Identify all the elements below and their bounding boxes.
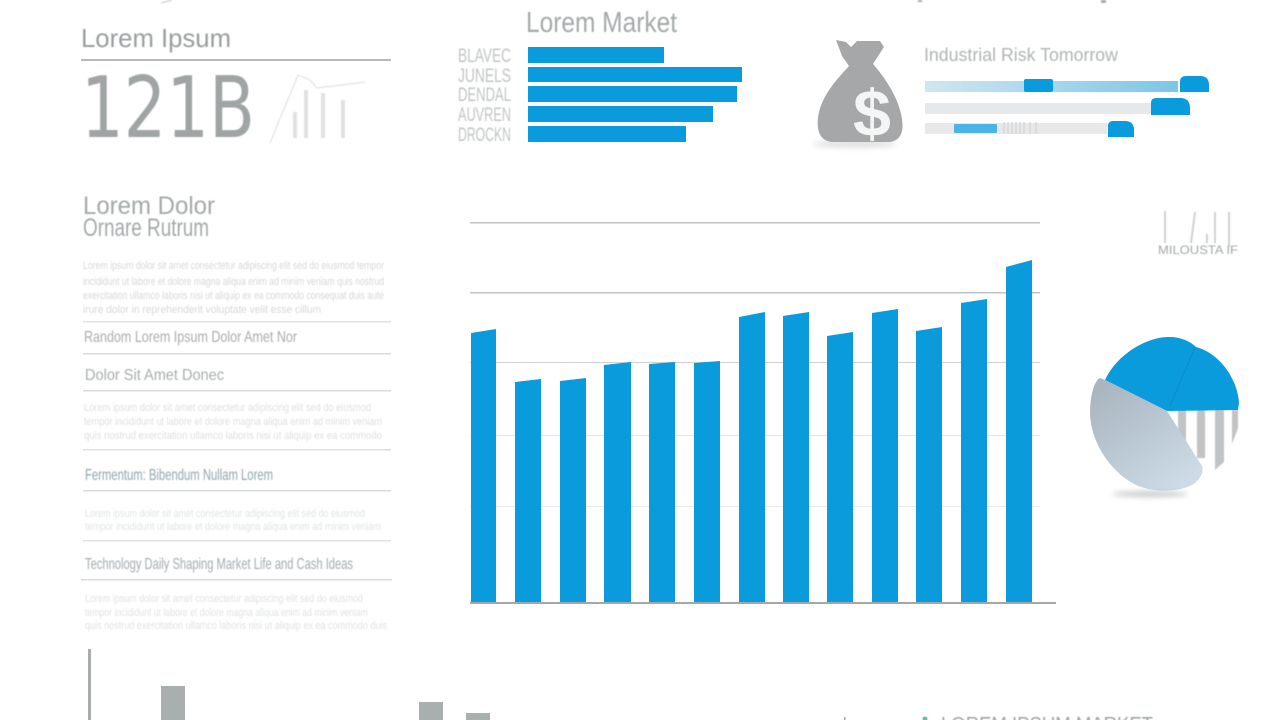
- icon: money bag: [813, 40, 903, 150]
- paragraph 1: Lorem ipsum dolor sit amet consectetur adipiscing elit sed do eiusmod tempor: [83, 260, 384, 272]
- row heading 2: Dolor Sit Amet Donec: [85, 367, 224, 384]
- paragraph 3: tempor incididunt ut labore et dolore magna aliqua enim ad minim veniam: [85, 521, 381, 533]
- paragraph 2: [84, 402, 382, 442]
- paragraph 2: Lorem ipsum dolor sit amet consectetur adipiscing elit sed do eiusmod: [84, 402, 371, 414]
- progress title: Industrial Risk Tomorrow: [924, 45, 1119, 65]
- bars: [161, 686, 490, 720]
- progress bar 2: [925, 98, 1190, 115]
- paragraph 3: Lorem ipsum dolor sit amet consectetur adipiscing elit sed do eiusmod: [85, 508, 365, 520]
- gridlines: [470, 222, 1040, 507]
- chart title: Lorem Market: [526, 7, 677, 39]
- striped slice: [1178, 410, 1238, 470]
- panel: headline metric: [81, 23, 391, 158]
- bars: [528, 47, 742, 142]
- icon: small bar chart with label: MILOUSTA IF: [1158, 243, 1238, 257]
- bar labels: JUNELS: [458, 66, 511, 87]
- icon: mini line and bar chart: [270, 75, 365, 143]
- x axis: [470, 602, 1056, 604]
- paragraph 4: tempor incididunt ut labore et dolore magna aliqua enim ad minim veniam: [85, 607, 368, 619]
- bar labels: DROCKN: [458, 125, 511, 146]
- panel: left text column: [81, 192, 392, 632]
- subheading: Ornare Rutrum: [83, 214, 209, 242]
- paragraph 1: [83, 260, 384, 316]
- panel: progress bars: [924, 45, 1209, 137]
- row heading 3: Fermentum: Bibendum Nullam Lorem: [85, 467, 273, 484]
- progress bar 3: [925, 121, 1134, 137]
- paragraph 2: tempor incididunt ut labore et dolore magna aliqua enim ad minim veniam: [84, 416, 382, 428]
- progress bar 1: [925, 76, 1209, 92]
- paragraph 4: Lorem ipsum dolor sit amet consectetur adipiscing elit sed do eiusmod: [85, 593, 363, 605]
- bar labels: [458, 46, 511, 146]
- heading: Lorem Ipsum: Lorem Ipsum: [81, 23, 231, 53]
- paragraph 1: exercitation ullamco laboris nisi ut aliquip ex ea commodo consequat duis aute: [83, 290, 384, 302]
- bar labels: AUVREN: [458, 105, 511, 126]
- footer label cut off: [844, 714, 1153, 720]
- subheading: Lorem Dolor: [83, 192, 215, 220]
- paragraph 1: irure dolor in reprehenderit voluptate velit esse cillum: [83, 304, 321, 316]
- columns: [471, 260, 1032, 604]
- top edge fragments: [161, 0, 1106, 3]
- paragraph 2: quis nostrud exercitation ullamco laboris nisi ut aliquip ex ea commodo: [84, 430, 382, 442]
- pie chart: [1090, 337, 1239, 496]
- bar labels: DENDAL: [458, 85, 511, 106]
- paragraph 4: [85, 593, 387, 632]
- panel: horizontal bar chart: [458, 7, 742, 146]
- row heading 4: Technology Daily Shaping Market Life and Cash Ideas: [85, 556, 353, 573]
- paragraph 3: [85, 508, 381, 533]
- big number: 121B: [81, 59, 255, 158]
- grey gradient slice: [1090, 378, 1203, 491]
- dollar sign: $: [853, 76, 891, 150]
- panel: bottom bar chart: [88, 649, 490, 720]
- row heading 1: Random Lorem Ipsum Dolor Amet Nor: [84, 329, 298, 346]
- icon: small bar chart with label: [1158, 211, 1238, 257]
- paragraph 1: incididunt ut labore et dolore magna aliqua enim ad minim veniam quis nostrud: [83, 276, 384, 288]
- blue slices: [1105, 337, 1239, 411]
- bar labels: BLAVEC: [458, 46, 511, 67]
- paragraph 4: quis nostrud exercitation ullamco laboris nisi ut aliquip ex ea commodo duis: [85, 620, 387, 632]
- panel: main column chart: [470, 222, 1056, 604]
